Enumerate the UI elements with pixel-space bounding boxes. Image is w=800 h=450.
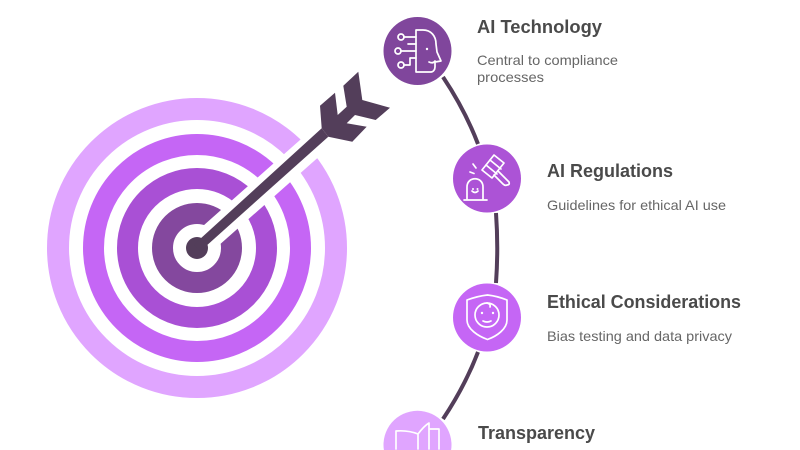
description: processes xyxy=(477,69,544,85)
arrow xyxy=(186,72,390,259)
step: Ethical Considerations xyxy=(453,284,741,352)
heading: AI Regulations xyxy=(547,161,673,181)
target rings xyxy=(58,109,336,387)
heading: Ethical Considerations xyxy=(547,292,741,312)
heading: AI Technology xyxy=(477,17,602,37)
description xyxy=(477,52,618,85)
icon: open book xyxy=(384,411,452,450)
description: Central to compliance xyxy=(477,52,618,68)
target with arrow xyxy=(58,72,390,387)
step: Transparency xyxy=(384,411,595,450)
description: Guidelines for ethical AI use xyxy=(547,197,726,213)
description: Bias testing and data privacy xyxy=(547,328,732,344)
step: AI Technology xyxy=(384,17,618,85)
icon: gavel and robot xyxy=(453,144,521,212)
connecting arc xyxy=(443,77,497,419)
icon: AI head xyxy=(384,17,452,85)
heading: Transparency xyxy=(478,423,595,443)
step: AI Regulations xyxy=(453,144,726,213)
icon: shield with face xyxy=(453,284,521,352)
